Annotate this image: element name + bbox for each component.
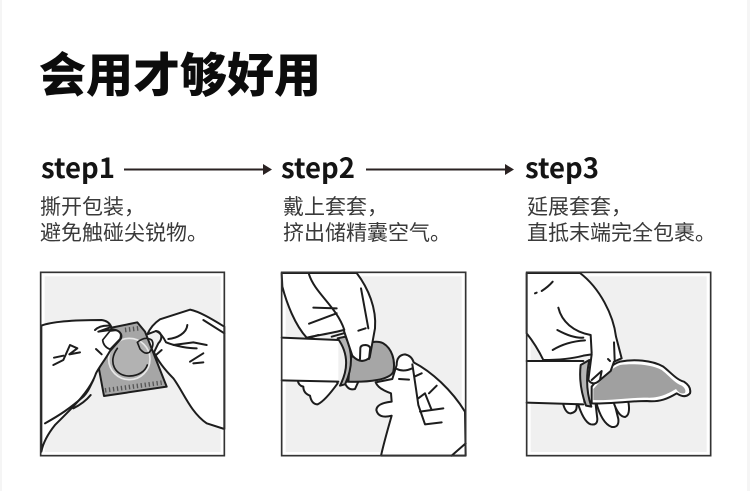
step 3 description — [527, 191, 716, 247]
icon: condom — [338, 337, 394, 386]
panel: step 3 rolling down to full cover — [527, 272, 711, 456]
icon: lower fingers — [563, 402, 629, 427]
step 3 description: 直抵末端完全包裹。 — [527, 217, 716, 247]
step 1 heading: step1 — [41, 146, 115, 186]
icon: condom — [580, 360, 690, 407]
icon: shaft — [527, 361, 583, 403]
icon: left hand — [41, 320, 121, 452]
step 2 description: 挤出储精囊空气。 — [283, 217, 451, 247]
icon: lower fingers — [298, 378, 358, 404]
icon: lower right hand — [376, 354, 466, 456]
icon: condom packet — [99, 322, 167, 396]
step 3 description: 延展套套， — [527, 191, 632, 221]
step 2 heading: step2 — [281, 146, 355, 186]
icon: upper hand — [282, 273, 375, 361]
icon: right hand — [137, 310, 224, 429]
icon: shaft — [282, 338, 338, 381]
step 1 description — [40, 191, 208, 247]
step 3 heading: step3 — [525, 146, 599, 186]
panel: step 2 putting on and squeezing air — [282, 272, 466, 456]
title: 会用才够好用 — [39, 37, 321, 106]
step 1 description: 撕开包装， — [40, 191, 145, 221]
icon: upper hand — [527, 273, 622, 383]
step 1 description: 避免触碰尖锐物。 — [40, 217, 208, 247]
panel: step 1 tearing the wrapper — [41, 272, 224, 456]
step 2 description — [283, 191, 451, 247]
step 2 description: 戴上套套， — [283, 191, 388, 221]
